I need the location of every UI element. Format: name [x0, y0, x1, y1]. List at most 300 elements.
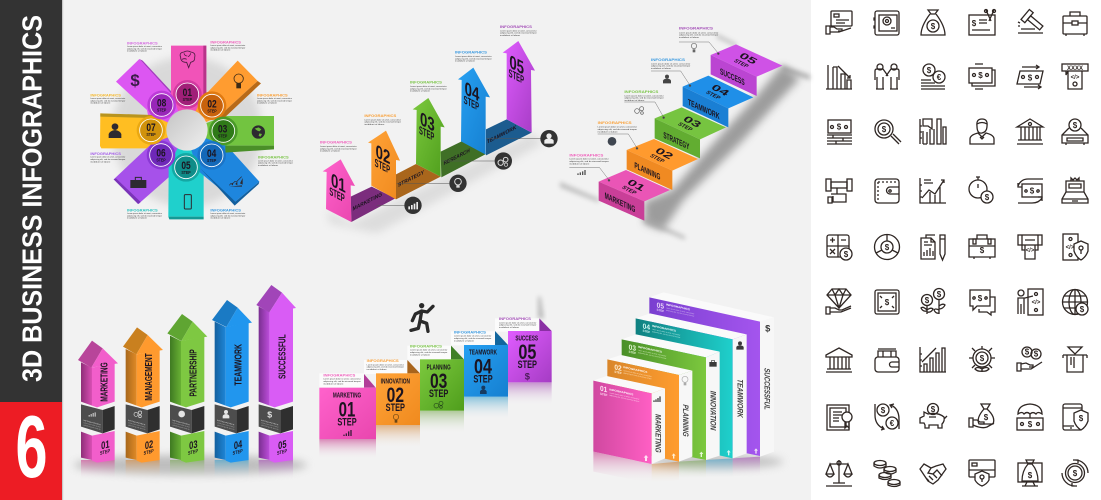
step 02: STEP [648, 153, 666, 164]
step 05: STEP [732, 58, 750, 69]
icon: wallet with cash [875, 349, 899, 372]
label: arrow 04: Lorem ipsum dolor sit amet, consectetur [455, 55, 492, 58]
icon: check and scissors: $ [972, 19, 977, 28]
icon: businessman [970, 119, 994, 144]
label: arrow 03: INFOGRAPHICS [410, 81, 443, 85]
arrow 05: 05 [509, 51, 524, 80]
icon: gavel [1018, 9, 1045, 33]
block 05 [508, 331, 552, 382]
box 03: INNOVATION [708, 390, 717, 431]
column 05: INFOGRAPHICS [261, 419, 278, 426]
block 02: STEP [386, 402, 405, 414]
icon: dollar and euro coins [921, 64, 945, 89]
label: block 01: INFOGRAPHICS [323, 374, 356, 378]
icon: cash register [1062, 178, 1088, 203]
label: step 02: incididunt ut labore [257, 102, 277, 105]
label: step 08: Lorem ipsum dolor sit amet, consectetur [127, 45, 163, 48]
label: step 08: incididunt ut labore [127, 50, 147, 53]
column 04: STEP [233, 448, 243, 457]
icon: line chart with arrow [920, 178, 946, 203]
icon: piggy bank: $ [931, 405, 936, 414]
icon: stack of cash: $ [978, 71, 983, 80]
band labels: STRATEGY [398, 170, 424, 189]
label: block 02: incididunt ut labore [367, 368, 387, 371]
step 01: MARKETING [605, 191, 635, 214]
block 05: 05 [518, 340, 536, 364]
step numbers: STEP [183, 97, 192, 103]
icon: briefcase [1063, 12, 1087, 36]
box 04 [636, 313, 747, 458]
box 03: Lorem ipsum dolor sit amet, consectetur [638, 349, 667, 358]
petal icons: $ [130, 71, 140, 90]
label: arrow 04: incididunt ut labore [455, 60, 475, 63]
icon: bank building [826, 348, 852, 372]
petal 03 [186, 116, 274, 153]
icon: hand with coins: $ [1025, 348, 1030, 356]
column 02: adipiscing elit sed do [128, 423, 145, 431]
label: step 05 [679, 27, 719, 39]
box 05: adipiscing elit, sed do eiusmod tempor [666, 309, 695, 318]
label: arrow 03: incididunt ut labore [410, 90, 430, 93]
label: step 04 [651, 58, 691, 70]
icon: monitor with bag: $ [1028, 471, 1033, 480]
label: step 07: adipiscing elit, sed do eiusmod tempor [90, 99, 126, 102]
icon: safe dollar [875, 290, 899, 314]
icon: hand with money bag [969, 404, 994, 428]
petal 07 [100, 113, 186, 148]
label: step 01: Lorem ipsum dolor sit amet, consectetur [210, 44, 246, 47]
box 01: MARKETING [654, 413, 663, 454]
icon: card and shield [969, 460, 995, 486]
label: step 07: INFOGRAPHICS [90, 93, 122, 97]
label: step 08: adipiscing elit, sed do eiusmod tempor [127, 47, 163, 50]
icon: calculator with coin [827, 235, 852, 260]
icon: presenter with note: </> [1032, 300, 1041, 306]
icon: calculator with coin: $ [844, 250, 849, 259]
label: step 01: INFOGRAPHICS [210, 40, 242, 44]
petal 08 [116, 59, 186, 131]
label: arrow 05: Lorem ipsum dolor sit amet, consectetur [500, 29, 537, 32]
step numbers: 07 [146, 122, 156, 134]
label: arrow 02: incididunt ut labore [364, 123, 385, 126]
box 02 [607, 355, 692, 462]
label: step 03: incididunt ut labore [624, 99, 645, 102]
arrow 03: 03 [420, 108, 435, 137]
label: block 02: INFOGRAPHICS [367, 359, 399, 363]
connector bands [351, 119, 532, 222]
arrow 05: STEP [509, 66, 524, 87]
step numbers: STEP [146, 132, 156, 138]
icon: safe [874, 11, 899, 35]
box 05: 05 [657, 300, 664, 311]
icon: handshake [920, 464, 946, 484]
block 03: 03 [430, 369, 447, 393]
icon: gear with coin plant [969, 346, 995, 372]
icon: monitor with bag [1018, 460, 1042, 486]
label: step 03: Lorem ipsum dolor sit amet, consectetur [624, 94, 664, 97]
label: block 04 [454, 330, 492, 342]
column 05: SUCCESSFUL [277, 334, 288, 379]
label: step 01: adipiscing elit, sed do eiusmod tempor [210, 46, 246, 49]
label: step 03: INFOGRAPHICS [258, 156, 289, 160]
column 03: PARTNERSHIP [189, 349, 200, 397]
column 01: adipiscing elit sed do [83, 423, 101, 431]
column 02: STEP [144, 448, 154, 457]
icon: atm note: XXXX [1067, 66, 1083, 72]
icon: presenter with note [1018, 289, 1043, 315]
step numbers: STEP [207, 108, 217, 114]
step 03: STRATEGY [663, 130, 689, 152]
column 02 [123, 327, 163, 463]
arrow 04: 04 [465, 78, 479, 106]
step rings [137, 80, 238, 182]
block 03: STEP [429, 388, 448, 400]
icon: hand with card [826, 11, 852, 34]
label: step 05: incididunt ut labore [679, 36, 699, 39]
step 04: TEAMWORK [688, 97, 720, 121]
label: arrow 02 [364, 114, 402, 126]
column 05: adipiscing elit sed do [261, 423, 278, 431]
label: step 04 [210, 208, 246, 220]
label: block 04: incididunt ut labore [454, 339, 474, 342]
label: step 04: INFOGRAPHICS [210, 208, 242, 212]
label: step 05 [127, 208, 163, 220]
block 03 [420, 359, 464, 411]
column 03: INFOGRAPHICS [172, 419, 190, 426]
panel: vertical arrows with cubes [74, 285, 307, 480]
petal 06 [114, 131, 186, 204]
icon: dollar and euro coins: $ [927, 66, 932, 75]
label: block 02: adipiscing elit, sed do eiusmod tempor [367, 366, 405, 369]
leader lines [569, 42, 719, 181]
label: step 01: Lorem ipsum dolor sit amet, consectetur [569, 158, 609, 161]
label: step 04: adipiscing elit, sed do eiusmod tempor [651, 65, 691, 68]
icon: hand with coins: $ [1034, 350, 1039, 358]
label: step 03: INFOGRAPHICS [624, 90, 659, 94]
label: step 03: adipiscing elit, sed do eiusmod tempor [258, 162, 294, 165]
icon: falling bar chart [826, 65, 852, 89]
column 02: 02 [145, 438, 153, 452]
label: block 04: INFOGRAPHICS [454, 330, 487, 334]
icon: chat with dollar: $ [978, 294, 983, 303]
arrow 02: 02 [376, 141, 390, 169]
icon: magnifier with dollar [875, 120, 901, 144]
icon: toolbox: $ [980, 246, 985, 255]
step numbers: STEP [181, 170, 191, 176]
column 01: Lorem ipsum dolor sit amet [83, 421, 101, 429]
label: step 03: adipiscing elit, sed do eiusmod tempor [624, 97, 664, 100]
column 04 [212, 300, 252, 463]
panel: isometric staircase [560, 27, 810, 240]
label: step 07 [90, 93, 126, 105]
petal 04 [186, 131, 259, 206]
icon: currency exchange [875, 404, 899, 430]
box 01: STEP [600, 392, 607, 397]
label: arrow 05: incididunt ut labore [500, 34, 520, 37]
icon: dollar donut [874, 234, 900, 260]
label: block 01: Lorem ipsum dolor sit amet, consectetur [323, 378, 361, 381]
column 03: 03 [189, 438, 197, 452]
column 04: 04 [234, 438, 242, 452]
block 05: SUCCESS [515, 333, 538, 342]
column 04: TEAMWORK [233, 344, 244, 386]
label: step 02: Lorem ipsum dolor sit amet, consectetur [257, 97, 293, 100]
panel: isometric step arrows [320, 25, 558, 233]
arrow 01: 01 [331, 170, 346, 198]
label: step 03 [624, 90, 664, 102]
label: arrow 03 [410, 81, 447, 93]
icon: note with shield: </> [1066, 245, 1075, 251]
label: arrow 02: INFOGRAPHICS [364, 114, 397, 118]
block 04: TEAMWORK [469, 348, 497, 357]
step 04: STEP [704, 90, 722, 101]
box 04: TEAMWORK [735, 378, 744, 419]
ground shadow [74, 455, 307, 475]
panel: icon grid background [811, 0, 1101, 500]
reflections [593, 452, 783, 483]
icon: two people [875, 64, 899, 89]
panel: sidebar [0, 0, 63, 500]
label: step 01: incididunt ut labore [569, 162, 590, 165]
icon: coin plants: $ [937, 290, 942, 299]
petal 01 [171, 46, 206, 131]
icon: chat with dollar [970, 290, 995, 315]
block 01 [319, 388, 376, 439]
box 05: STEP [657, 308, 664, 313]
arrow 02 [368, 131, 400, 199]
step 03: STEP [676, 121, 694, 133]
label: arrow 03: Lorem ipsum dolor sit amet, consectetur [410, 85, 447, 88]
box 05: SUCCESSFUL [763, 367, 772, 411]
band labels: TEAMWORK [487, 125, 517, 146]
box 05: Lorem ipsum dolor sit amet, consectetur [666, 306, 695, 315]
step numbers: 03 [218, 124, 227, 136]
label: step 07: incididunt ut labore [90, 102, 111, 105]
label: arrow 02: Lorem ipsum dolor sit amet, consectetur [364, 118, 402, 121]
column 03: adipiscing elit sed do [172, 423, 190, 431]
step 02: 02 [652, 147, 675, 162]
column 04: Lorem ipsum dolor sit amet [217, 421, 235, 429]
label: step 06: Lorem ipsum dolor sit amet, consectetur [90, 156, 126, 159]
step numbers: 06 [156, 148, 166, 160]
icon: globe with coin: $ [1080, 305, 1085, 314]
label: block 05: incididunt ut labore [499, 326, 519, 329]
step 05: SUCCESS [720, 66, 745, 87]
step numbers: STEP [156, 158, 166, 164]
label: step 08: INFOGRAPHICS [127, 41, 158, 45]
icon: atm note [1062, 64, 1088, 89]
step numbers: STEP [218, 134, 228, 140]
label: step 03: incididunt ut labore [258, 164, 278, 167]
block 04: 04 [474, 355, 492, 379]
icon: circular coin [1062, 460, 1088, 486]
panel: finance icon grid [826, 9, 1088, 486]
step 03 [655, 107, 726, 158]
icon: phone with shield: $ [1079, 414, 1084, 423]
label: step 05: INFOGRAPHICS [127, 208, 158, 212]
label: arrow 01: incididunt ut labore [320, 150, 340, 153]
label: step 04: incididunt ut labore [210, 217, 231, 220]
label: block 03 [410, 344, 448, 356]
band labels [353, 125, 517, 213]
label: block 03: INFOGRAPHICS [410, 344, 443, 348]
column 01: INFOGRAPHICS [83, 419, 101, 426]
step 02 [627, 139, 698, 190]
step 01 [599, 170, 670, 221]
icon: cash on bricks [827, 120, 852, 144]
box 01: 01 [600, 384, 607, 394]
label: arrow 05: adipiscing elit, sed do eiusmod tempor [500, 32, 537, 35]
label: step 06: incididunt ut labore [90, 160, 111, 163]
label: block 01 [323, 374, 361, 385]
label: block 02: Lorem ipsum dolor sit amet, consectetur [367, 363, 405, 366]
icon: cash with arrows: $ [1030, 186, 1035, 196]
box 04: STEP [643, 329, 650, 334]
column 02: INFOGRAPHICS [128, 419, 145, 426]
box 04: INFOGRAPHICS [652, 324, 676, 333]
label: step 03 [258, 156, 294, 167]
icon: hand with money bag: $ [984, 413, 989, 422]
arrow 03: STEP [419, 123, 434, 144]
label: step 05: Lorem ipsum dolor sit amet, consectetur [679, 31, 719, 34]
box 01: Lorem ipsum dolor sit amet, consectetur [609, 391, 640, 401]
icon: scales [826, 460, 852, 486]
step numbers: 08 [157, 98, 166, 110]
box 03: INFOGRAPHICS [638, 345, 662, 354]
label: block 04: adipiscing elit, sed do eiusmod tempor [454, 337, 492, 340]
block 05: $ [525, 371, 531, 381]
box 01: INFOGRAPHICS [609, 387, 634, 396]
icon: piggy bank [920, 404, 947, 428]
label: step 02: INFOGRAPHICS [598, 121, 632, 125]
label: block 05: adipiscing elit, sed do eiusmod tempor [499, 324, 537, 327]
step 01: 01 [624, 178, 647, 193]
label: arrow 02: adipiscing elit, sed do eiusmod tempor [364, 121, 402, 124]
box 02: Lorem ipsum dolor sit amet, consectetur [623, 369, 652, 378]
step 01: STEP [620, 185, 638, 196]
icon: flying cash [1017, 65, 1043, 89]
corner shadow [538, 297, 544, 318]
label: block 03: Lorem ipsum dolor sit amet, consectetur [410, 349, 448, 352]
icon: flying cash: $ [1028, 74, 1033, 82]
label: arrow 03: adipiscing elit, sed do eiusmod tempor [410, 87, 447, 90]
step 04: 04 [708, 83, 731, 98]
block 04: STEP [473, 374, 493, 386]
label: step 04: adipiscing elit, sed do eiusmod tempor [210, 214, 246, 217]
center hole [166, 109, 208, 151]
label: step 04: Lorem ipsum dolor sit amet, consectetur [651, 62, 691, 65]
petal icons [109, 51, 265, 209]
box 03: 03 [629, 342, 636, 353]
band labels: MARKETING [353, 192, 382, 213]
icon: diamond on hand [826, 289, 851, 314]
box 03: STEP [629, 350, 636, 355]
icon: umbrella over cash [1017, 404, 1043, 430]
label: step 05: adipiscing elit, sed do eiusmod tempor [679, 34, 719, 37]
label: arrow 04: adipiscing elit, sed do eiusmod tempor [455, 57, 492, 60]
label: arrow 01: INFOGRAPHICS [320, 141, 353, 145]
icon: dollar and euro coins: € [937, 73, 942, 82]
reflections [81, 460, 293, 480]
icon: currency exchange: € [890, 419, 895, 428]
icon badges [377, 130, 558, 214]
step 05: 05 [736, 52, 759, 67]
label: block 04: Lorem ipsum dolor sit amet, consectetur [454, 335, 492, 338]
icon: coin in box [1062, 119, 1088, 145]
icon: rising bar chart [920, 347, 946, 372]
block 03: PLANNING [427, 363, 451, 372]
arrow 03 [413, 98, 445, 177]
column 01: STEP [100, 448, 110, 457]
label: step 02 [598, 121, 638, 133]
label: block 03: adipiscing elit, sed do eiusmod tempor [410, 351, 448, 354]
block 01: STEP [337, 416, 357, 428]
icon: safe dollar: $ [885, 298, 890, 307]
box 01: adipiscing elit, sed do eiusmod tempor [609, 394, 640, 403]
icon: cash with arrows [1018, 179, 1043, 203]
icon: stopwatch and coin [969, 177, 993, 203]
label: block 01: incididunt ut labore [323, 382, 344, 385]
step numbers: STEP [157, 108, 167, 114]
icon: gavel in hand [826, 179, 852, 203]
box 04: Lorem ipsum dolor sit amet, consectetur [652, 328, 681, 337]
icon: dollar donut: $ [885, 243, 890, 252]
icon: toolbox [969, 235, 995, 259]
icon: wallet [875, 179, 899, 203]
column 05: $ [267, 410, 272, 420]
step numbers: 05 [181, 160, 191, 172]
arrow 01 [323, 159, 355, 222]
icon: stopwatch and coin: $ [985, 193, 990, 202]
box 05 [649, 292, 774, 457]
icon: money bag: $ [931, 22, 936, 31]
arrow 04 [458, 68, 490, 155]
panel: nested 3D boxes [593, 292, 783, 483]
box 01 [593, 376, 665, 464]
icon: atm with code [1018, 235, 1042, 259]
label: step 05: incididunt ut labore [127, 217, 147, 220]
label: step 01: incididunt ut labore [210, 49, 231, 52]
icon: card slot [1063, 347, 1087, 372]
label: arrow 01 [320, 141, 357, 153]
box 03: adipiscing elit, sed do eiusmod tempor [638, 351, 667, 360]
column 05: 05 [278, 438, 286, 452]
arrow 02: STEP [375, 156, 390, 177]
step numbers: 02 [207, 98, 217, 110]
label: step 02: incididunt ut labore [598, 130, 618, 133]
label: step 05: adipiscing elit, sed do eiusmod tempor [127, 214, 163, 217]
step numbers: 01 [183, 87, 192, 99]
column 04: INFOGRAPHICS [217, 419, 234, 426]
icon: umbrella over cash: $ [1028, 420, 1033, 429]
label: step 02 [257, 93, 293, 105]
box 03 [622, 334, 720, 460]
icon: report and pen [921, 235, 945, 260]
icon: coin in box: $ [1073, 121, 1078, 130]
column 01: 01 [101, 438, 109, 452]
reflections [319, 382, 552, 459]
label: step 05: INFOGRAPHICS [679, 27, 714, 31]
icon: gear with coin plant: $ [980, 354, 985, 363]
label: step 06: adipiscing elit, sed do eiusmod tempor [90, 158, 126, 161]
label: step 04: Lorem ipsum dolor sit amet, consectetur [210, 212, 246, 215]
icon: certificate [827, 405, 852, 430]
label: block 01: adipiscing elit, sed do eiusmod tempor [323, 380, 361, 383]
label: block 02 [367, 359, 405, 371]
box 04: adipiscing elit, sed do eiusmod tempor [652, 330, 681, 339]
step 05 [711, 44, 782, 96]
band labels: RESEARCH [444, 148, 470, 167]
